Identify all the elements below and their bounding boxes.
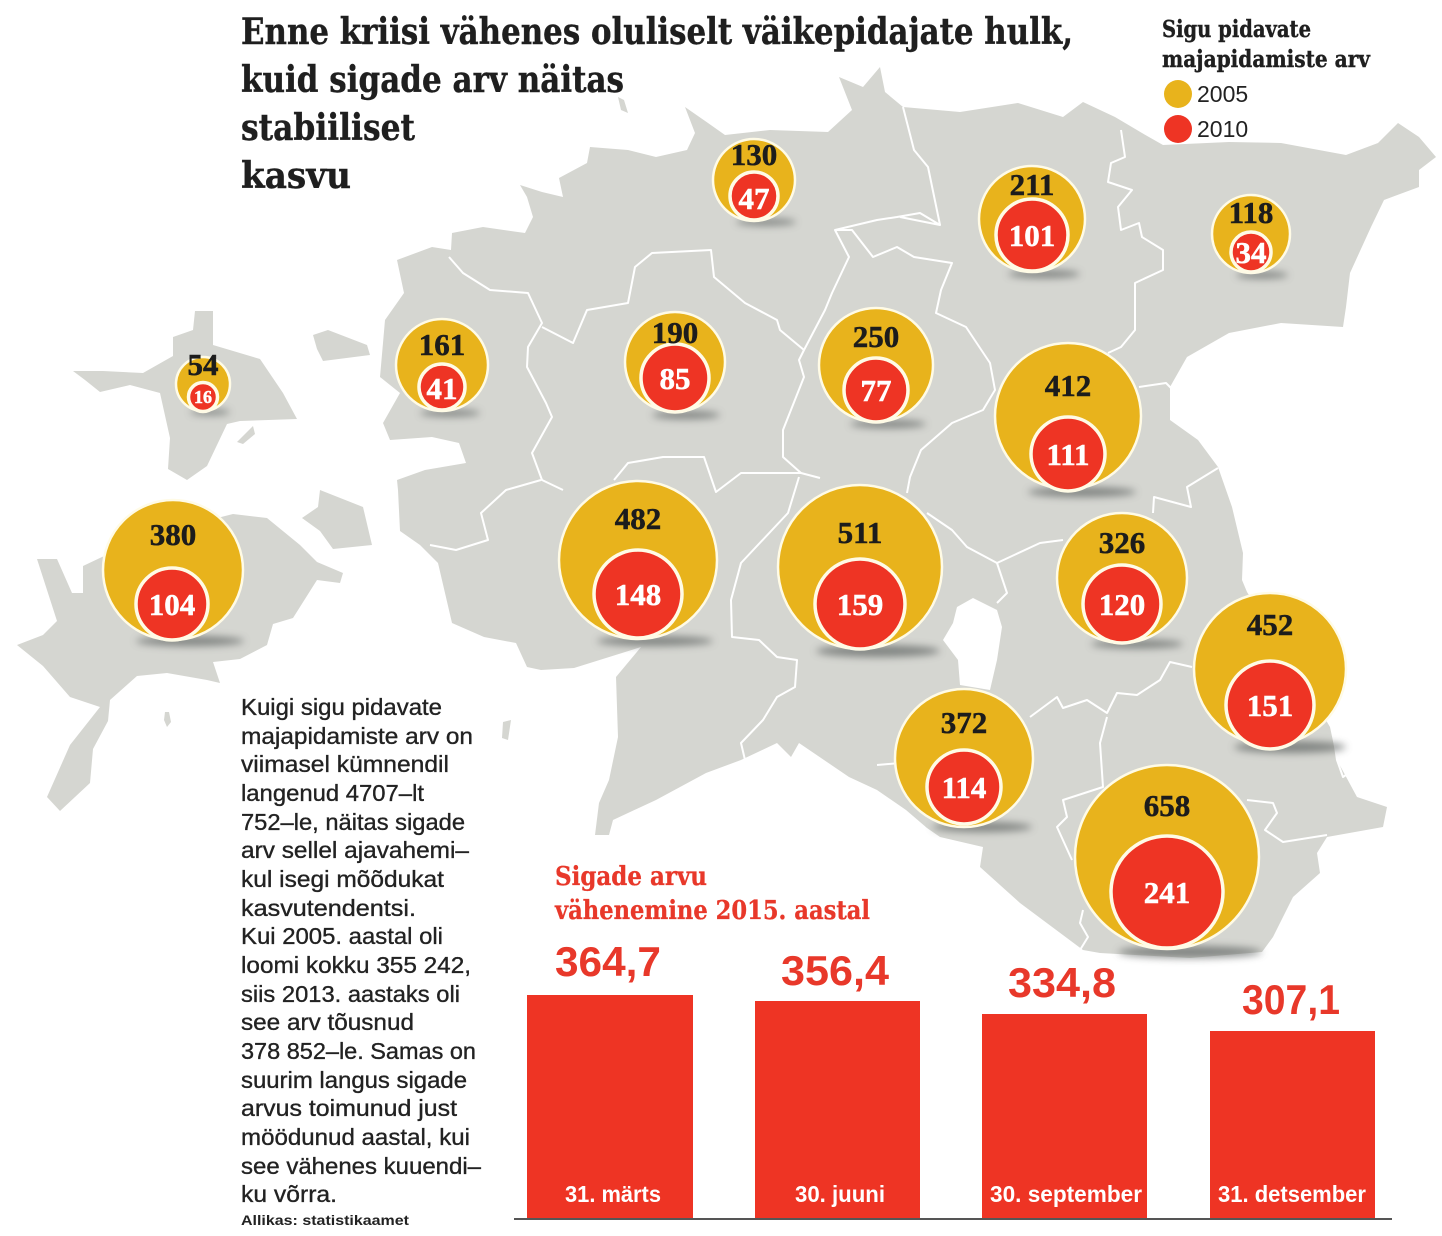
bar 30. september: 30. september [990,1181,1142,1207]
bubble 452 / 151 [1194,593,1346,753]
bubble 372 / 114 [895,689,1033,832]
county borders [430,107,1353,950]
body text: siis 2013. aastaks oli [241,981,460,1007]
bar 31. märts: 364,7 [555,938,661,985]
mainland [380,67,1436,958]
bubble 54 / 16: 16 [194,387,212,407]
body text: loomi kokku 355 242, [241,952,471,978]
bar 31. detsember: 307,1 [1242,976,1340,1023]
lake Võrtsjärv [943,598,1002,690]
title: kasvu [241,155,351,197]
body text [241,694,481,1207]
bubble 190 / 85: 190 [652,315,698,350]
legend heading [1162,16,1371,73]
bubble 211 / 101: 101 [1009,218,1055,253]
source: Allikas: statistikaamet [241,1212,409,1228]
bubble 452 / 151: 151 [1247,688,1293,723]
island Saaremaa [17,514,343,811]
bar chart heading [554,862,870,926]
bubble 118 / 34: 118 [1229,195,1273,230]
bubble 511 / 159: 511 [838,515,882,550]
bar 31. detsember: 31. detsember [1218,1181,1366,1207]
bubble 130 / 47 [713,137,796,226]
bubble 161 / 41: 41 [426,371,458,406]
bubble 190 / 85: 85 [660,361,690,396]
bubble 482 / 148: 148 [615,577,661,612]
bubble 326 / 120: 120 [1099,587,1145,622]
bar 30. juuni: 356,4 [781,947,890,994]
legend item 2005: 2005 [1197,81,1248,107]
body text: 752–le, näitas sigade [241,809,465,835]
body text: viimasel kümnendil [241,751,449,777]
body text: ku võrra. [241,1181,337,1207]
legend [1162,16,1371,143]
bubble 250 / 77: 77 [860,373,892,408]
bubble 326 / 120: 326 [1099,525,1145,560]
bar 30. september [982,959,1147,1218]
body text: kul isegi mõõdukat [241,866,445,892]
body text: arv sellel ajavahemi– [241,837,469,863]
bubble 54 / 16: 54 [188,347,218,382]
title [241,11,1073,197]
bubble 511 / 159: 159 [837,587,883,622]
bubble 130 / 47: 130 [731,137,777,172]
bubble 412 / 111 [995,343,1141,497]
bubble 511 / 159 [778,485,942,657]
bubble 380 / 104: 380 [150,517,196,552]
bubble 54 / 16 [176,347,230,415]
bubble 250 / 77 [819,308,933,428]
body text: suurim langus sigade [241,1067,467,1093]
bar chart heading: vähenemine 2015. aastal [554,896,870,926]
legend item 2010: 2010 [1197,116,1248,142]
bubble 211 / 101: 211 [1010,167,1054,202]
body text: kasvutendentsi. [241,895,416,921]
island Vormsi [313,330,370,361]
map of Estonia [17,67,1436,958]
legend item 2005 [1164,80,1248,108]
title: Enne kriisi vähenes oluliselt väikepidajate hulk, [241,11,1073,53]
bubble 482 / 148: 482 [615,501,661,536]
title: stabiiliset [241,107,415,149]
small islands [164,97,628,740]
body text: Kui 2005. aastal oli [241,923,443,949]
body text: möödunud aastal, kui [241,1124,470,1150]
bubble 118 / 34 [1212,195,1290,278]
bubble 326 / 120 [1057,513,1187,648]
body text: Kuigi sigu pidavate [241,694,442,720]
bar 31. märts [527,938,693,1218]
bubble 161 / 41 [396,319,488,416]
bubble 380 / 104 [103,500,244,646]
bubble 412 / 111: 111 [1046,437,1090,472]
bar 30. juuni: 30. juuni [795,1181,885,1207]
bubble 372 / 114: 114 [942,770,986,805]
legend heading: Sigu pidavate [1162,16,1311,43]
title: kuid sigade arv näitas [241,59,624,101]
legend item 2010 [1164,115,1248,143]
bubble 118 / 34: 34 [1236,235,1266,270]
bubble 658 / 241 [1075,765,1262,958]
legend heading: majapidamiste arv [1162,46,1371,73]
body text: langenud 4707–lt [241,780,425,806]
island Muhu [302,490,372,549]
bubble 372 / 114: 372 [941,705,987,740]
bar 30. juuni [755,947,920,1218]
bubble 250 / 77: 250 [853,319,899,354]
bubble 380 / 104: 104 [149,587,195,622]
body text: 378 852–le. Samas on [241,1038,476,1064]
bar 31. märts: 31. märts [565,1181,661,1207]
bubble 190 / 85 [625,312,725,419]
bar 31. detsember [1210,976,1375,1218]
bubble 130 / 47: 47 [738,181,770,216]
bubble 658 / 241: 241 [1144,875,1190,910]
bubble 658 / 241: 658 [1144,788,1190,823]
body text: see arv tõusnud [241,1009,414,1035]
bar 30. september: 334,8 [1008,959,1116,1006]
bubble 161 / 41: 161 [419,327,465,362]
island Hiiumaa [73,311,297,480]
body text: see vähenes kuuendi– [241,1153,481,1179]
bubble 452 / 151: 452 [1247,607,1293,642]
bubble 412 / 111: 412 [1045,368,1091,403]
body text: arvus toimunud just [241,1095,458,1121]
bubble 482 / 148 [559,481,717,646]
body text: majapidamiste arv on [241,723,473,749]
bar chart heading: Sigade arvu [555,862,707,892]
bubble 211 / 101 [979,166,1085,278]
bar chart [514,938,1392,1220]
